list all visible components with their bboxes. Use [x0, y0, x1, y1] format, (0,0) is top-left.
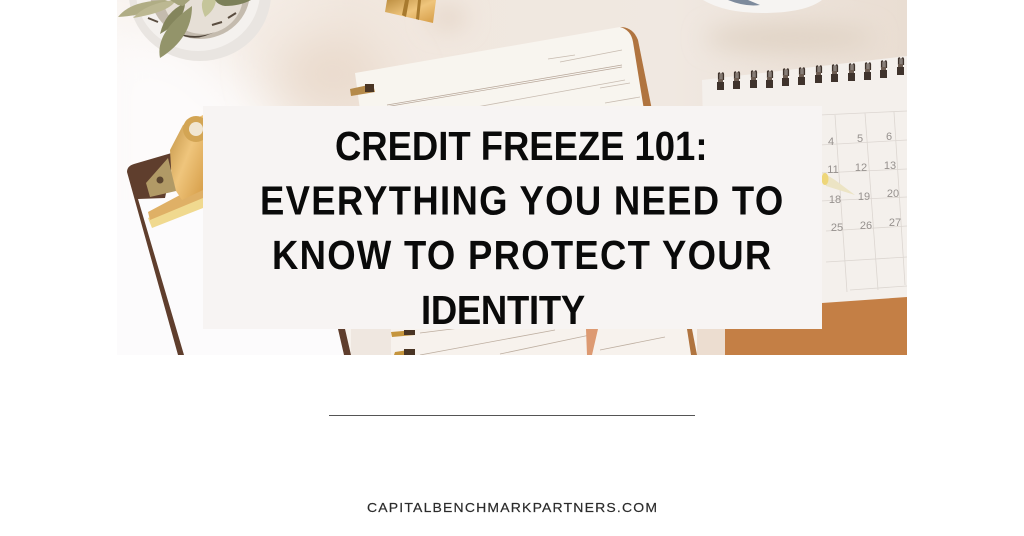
bottom notebook: [338, 328, 725, 355]
icon: gold binder clip: [385, 0, 466, 28]
calendar dates: 25: [831, 222, 843, 234]
calendar dates: 5: [857, 133, 863, 145]
calendar dates: [827, 131, 901, 234]
calendar dates: 20: [887, 188, 899, 200]
title text: IDENTITY: [421, 288, 585, 334]
calendar binding rings: [717, 58, 904, 90]
calendar dates: 19: [858, 191, 870, 203]
calendar dates: 18: [829, 194, 841, 206]
clipboard with gold clip: [127, 115, 209, 355]
icon: succulent in white pot: [118, 0, 271, 61]
calendar dates: 12: [855, 162, 867, 174]
calendar dates: 27: [889, 217, 901, 229]
icon: plate: [703, 0, 875, 52]
title panel: [203, 106, 822, 334]
title text: KNOW TO PROTECT YOUR: [272, 233, 771, 279]
title text: EVERYTHING YOU NEED TO: [260, 179, 783, 224]
footer website: CAPITALBENCHMARKPARTNERS.COM: [367, 500, 657, 515]
divider line: [329, 415, 695, 416]
calendar dates: 4: [828, 136, 834, 148]
calendar dates: 13: [884, 160, 896, 172]
background photo: desk flat lay: [90, 0, 907, 355]
calendar dates: 6: [886, 131, 892, 143]
title text: CREDIT FREEZE 101:: [335, 124, 707, 170]
calendar and cork board: [702, 56, 907, 355]
calendar dates: 11: [827, 164, 839, 176]
top notebook: [350, 27, 652, 110]
title text: [260, 124, 783, 334]
calendar dates: 26: [860, 220, 872, 232]
